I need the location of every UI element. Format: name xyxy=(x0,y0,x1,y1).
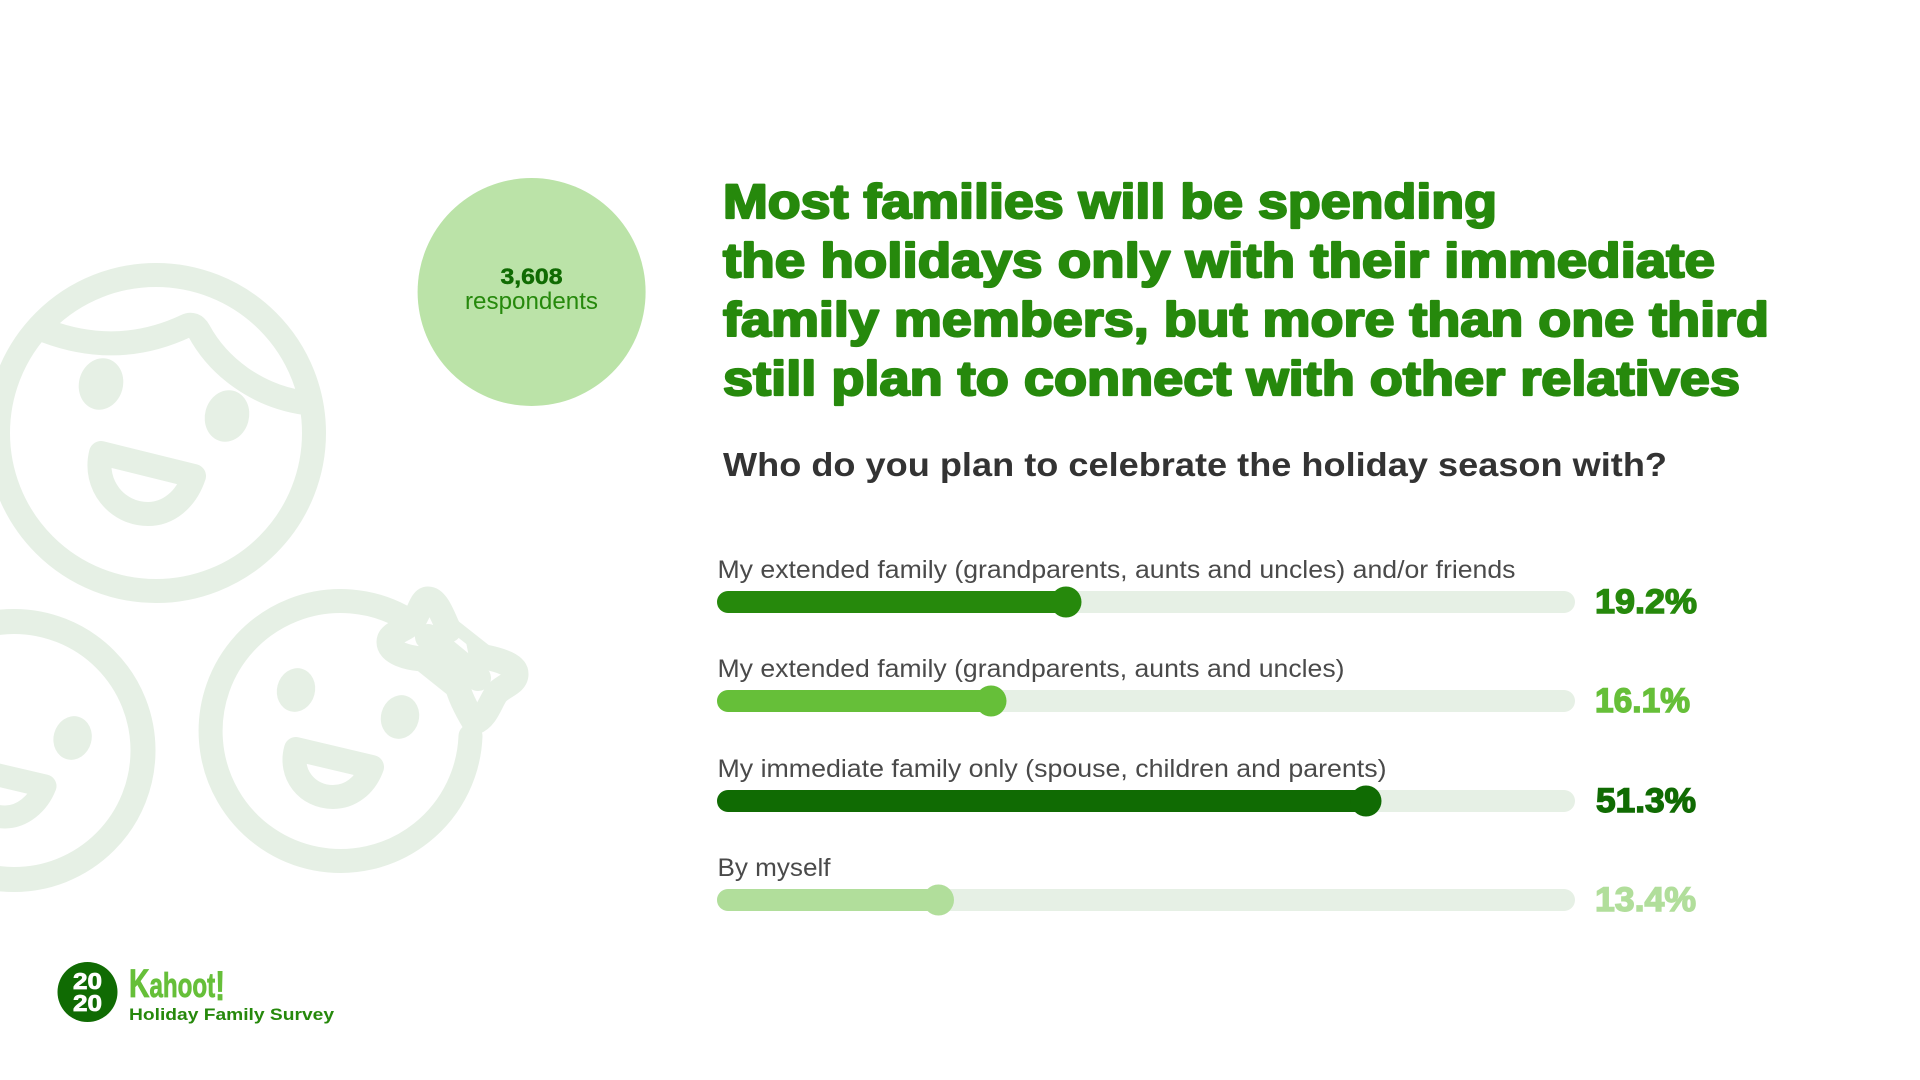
icon: baby girl face with bow xyxy=(211,599,516,861)
footer logo block xyxy=(58,962,335,1024)
icon: 2020 badge xyxy=(58,962,118,1022)
title xyxy=(723,176,1769,406)
bar row: by myself 13.4%: By myself xyxy=(718,854,831,882)
bar row: by myself 13.4%: 13.4% xyxy=(1595,881,1696,919)
bar row: extended family 16.1% xyxy=(717,655,1690,720)
bar row: by myself 13.4% xyxy=(717,854,1696,919)
title: still plan to connect with other relatives xyxy=(723,353,1740,406)
icon: woman face xyxy=(0,275,314,591)
title: Most families will be spending xyxy=(723,176,1497,229)
bar row: extended family and friends 19.2%: My extended family (grandparents, aunts and uncles) and/or friends xyxy=(718,556,1516,584)
bar row: extended family 16.1%: My extended family (grandparents, aunts and uncles) xyxy=(718,655,1344,683)
title: the holidays only with their immediate xyxy=(723,235,1715,288)
icon: 2020 badge: 20 xyxy=(73,990,102,1016)
respondents badge: respondents xyxy=(465,288,598,315)
question subheading: Who do you plan to celebrate the holiday season with? xyxy=(723,446,1667,483)
bar row: extended family and friends 19.2% xyxy=(717,556,1697,621)
bar row: extended family and friends 19.2%: 19.2% xyxy=(1595,583,1697,621)
bar chart: who respondents celebrate with xyxy=(717,556,1697,919)
bar row: extended family 16.1%: 16.1% xyxy=(1595,682,1690,720)
survey name: Holiday Family Survey xyxy=(129,1005,335,1024)
respondents badge: 3,608 xyxy=(500,264,562,289)
icon: 2020 badge: 20 xyxy=(73,968,102,994)
Kahoot! wordmark: Kahoot xyxy=(129,962,215,1006)
icon: cropped child face xyxy=(0,622,143,880)
Kahoot! wordmark: ! xyxy=(215,962,225,1009)
title: family members, but more than one third xyxy=(723,294,1769,347)
bar row: immediate family 51.3% xyxy=(717,755,1696,820)
respondents badge xyxy=(418,178,646,406)
bar row: immediate family 51.3%: 51.3% xyxy=(1596,782,1696,820)
bar row: immediate family 51.3%: My immediate family only (spouse, children and parents) xyxy=(718,755,1386,783)
illustration: three smiling faces xyxy=(0,275,516,880)
